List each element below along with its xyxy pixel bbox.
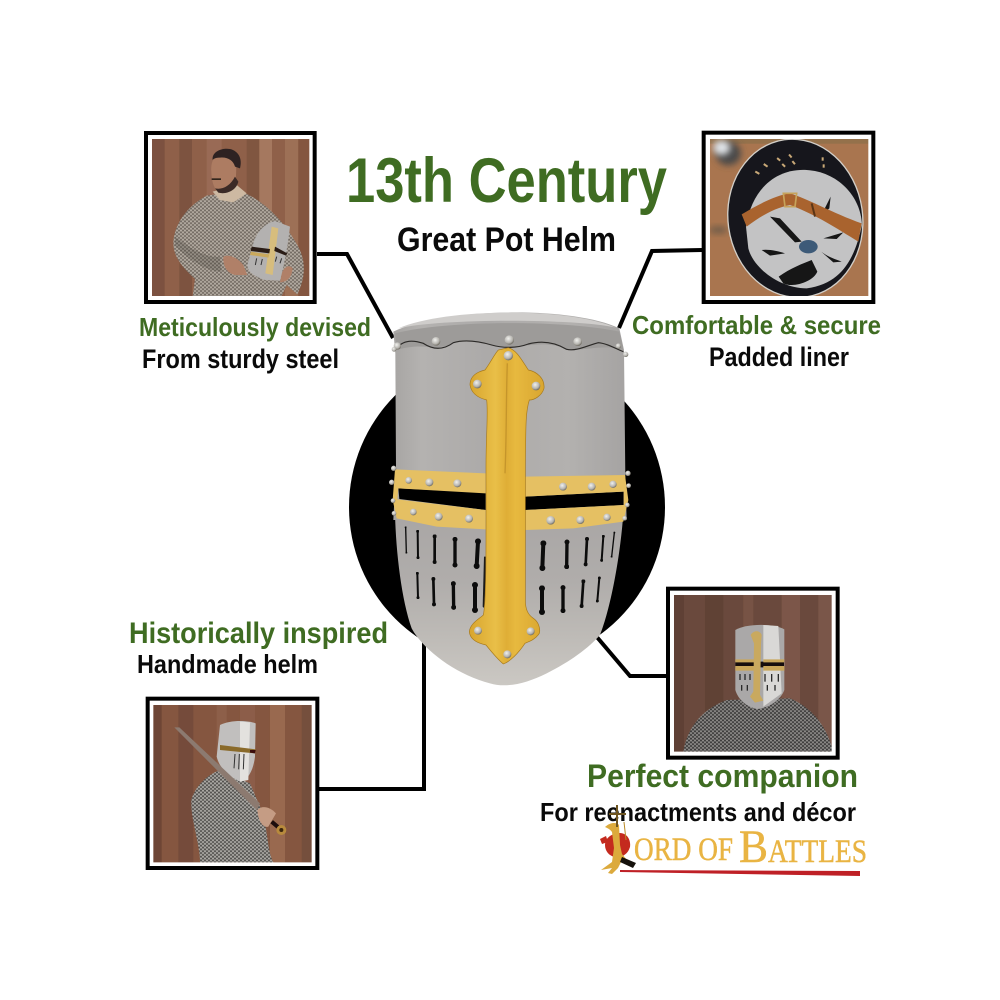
caption: comfortable and secure [632, 310, 881, 372]
caption: meticulously devised: Meticulously devised [139, 312, 371, 342]
shadow beside cross [483, 557, 487, 610]
brass cross [469, 348, 544, 664]
caption: meticulously devised: From sturdy steel [142, 344, 339, 374]
panel: man in mail holding helm [144, 131, 317, 304]
crown top band shading [395, 323, 623, 350]
title: 13th Century [346, 146, 667, 216]
subtitle: Great Pot Helm [397, 221, 616, 259]
caption: comfortable and secure: Comfortable & secure [632, 310, 881, 340]
black circle behind helm [349, 349, 665, 665]
caption: historically inspired [129, 617, 388, 679]
brass bands [393, 469, 628, 530]
caption: perfect companion [540, 758, 858, 827]
logo wordmark: ORD OF [634, 832, 733, 868]
logo emblem [600, 805, 636, 874]
connector lines [317, 250, 702, 789]
helm crown [393, 312, 627, 520]
helm face plate [395, 513, 623, 685]
logo underline [620, 870, 860, 876]
caption: comfortable and secure: Padded liner [709, 342, 849, 372]
panel: knight with sword [146, 697, 319, 870]
helm [389, 312, 631, 685]
cross centre crease [505, 363, 507, 473]
caption: historically inspired: Handmade helm [137, 649, 318, 679]
rivets [389, 335, 631, 658]
caption: historically inspired: Historically inspired [129, 617, 388, 650]
logo: Lord of Battles: ATTLES [768, 834, 867, 870]
caption: meticulously devised [139, 312, 371, 374]
panel: knight wearing helm [666, 587, 840, 760]
crown top plate highlight [398, 313, 615, 328]
scalloped edge [395, 341, 623, 352]
panel: padded liner inside helm [702, 130, 875, 307]
caption: perfect companion: For reenactments and décor [540, 797, 856, 827]
visor eye slit [398, 488, 624, 510]
caption: perfect companion: Perfect companion [587, 758, 858, 794]
logo: Lord of Battles [600, 805, 867, 876]
logo: Lord of Battles: B [739, 821, 768, 873]
vent slits [406, 527, 614, 612]
infographic canvas [130, 130, 880, 876]
